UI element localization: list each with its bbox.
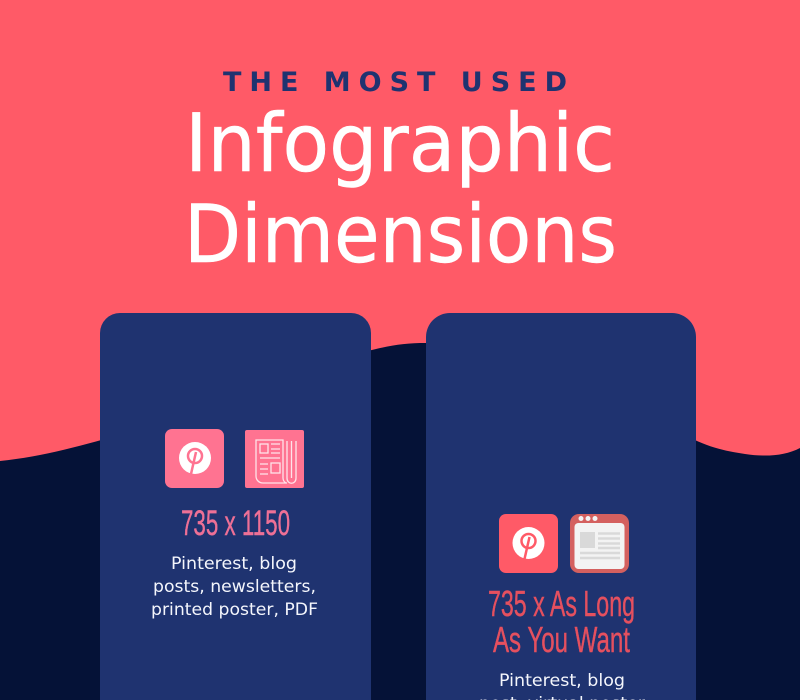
dimension label: 735 x As Long bbox=[488, 583, 635, 624]
dimension label bbox=[488, 583, 635, 660]
icon: pinterest bbox=[165, 429, 224, 488]
description bbox=[151, 554, 318, 620]
description: Pinterest, blog bbox=[171, 554, 297, 574]
icon: browser window bbox=[570, 514, 629, 573]
description: posts, newsletters, bbox=[153, 577, 316, 597]
coral wave header bbox=[0, 0, 800, 461]
icon: pinterest bbox=[499, 514, 558, 573]
kicker heading: THE MOST USED bbox=[223, 67, 567, 98]
panel: left card bbox=[100, 313, 371, 700]
icon: newspaper bbox=[245, 430, 304, 488]
title: Dimensions bbox=[184, 188, 617, 281]
description bbox=[479, 671, 645, 700]
title bbox=[184, 97, 617, 281]
dimension label: As You Want bbox=[493, 619, 630, 660]
panel: right card bbox=[426, 313, 696, 700]
dimension label: 735 x 1150 bbox=[181, 504, 290, 543]
description: Pinterest, blog bbox=[499, 671, 625, 691]
title: Infographic bbox=[185, 97, 615, 190]
description: printed poster, PDF bbox=[151, 600, 318, 620]
